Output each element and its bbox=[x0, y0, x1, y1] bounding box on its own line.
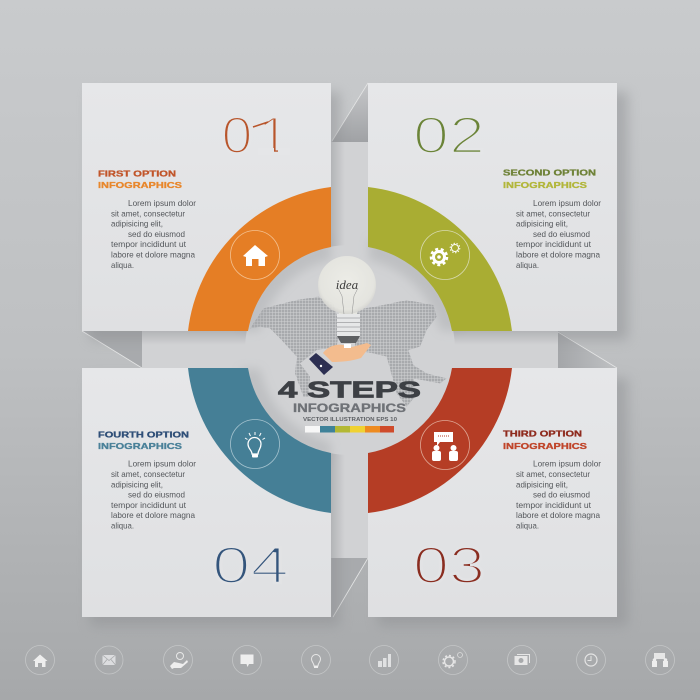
icon: gears bbox=[438, 646, 468, 674]
heading: THIRD OPTION bbox=[503, 428, 582, 438]
heading bbox=[98, 430, 189, 451]
body text bbox=[111, 198, 196, 270]
body text: tempor incididunt ut bbox=[516, 239, 592, 249]
body text bbox=[516, 198, 601, 270]
heading bbox=[503, 428, 588, 451]
number 01 bbox=[222, 107, 290, 165]
number 03: 03 bbox=[413, 537, 485, 595]
hand holding bulb bbox=[309, 343, 371, 375]
icon: banknote bbox=[508, 646, 536, 674]
small caption: VECTOR ILLUSTRATION EPS 10 bbox=[303, 417, 397, 423]
heading: FIRST OPTION bbox=[98, 168, 176, 178]
body text: sit amet, consectetur bbox=[516, 208, 590, 218]
number 02: 02 bbox=[413, 107, 485, 165]
world map bbox=[250, 297, 447, 407]
number 04: 04 bbox=[212, 537, 289, 595]
body text: tempor incididunt ut bbox=[111, 239, 187, 249]
heading: INFOGRAPHICS bbox=[98, 180, 183, 190]
body text bbox=[516, 459, 601, 530]
center cross strips bbox=[142, 142, 558, 558]
body text: sed do eiusmod bbox=[128, 490, 185, 500]
heading bbox=[503, 168, 596, 190]
icon: home bbox=[26, 646, 54, 674]
icon: discussion bbox=[420, 420, 470, 470]
arc: red bbox=[368, 368, 512, 513]
icon: bulb bbox=[302, 646, 330, 674]
icon: speech bbox=[232, 646, 262, 674]
body text: aliqua. bbox=[516, 520, 539, 530]
body text: labore et dolore magna bbox=[516, 250, 600, 260]
body text: sed do eiusmod bbox=[533, 229, 590, 239]
center title bbox=[278, 376, 421, 423]
heading bbox=[98, 168, 183, 190]
heading: FOURTH OPTION bbox=[98, 430, 189, 440]
body text: labore et dolore magna bbox=[111, 510, 195, 520]
body text: sit amet, consectetur bbox=[111, 208, 185, 218]
body text: Lorem ipsum dolor bbox=[128, 198, 196, 208]
icon: clock bbox=[576, 646, 606, 674]
icon: gears bbox=[420, 230, 470, 280]
center circle bbox=[245, 245, 455, 455]
body text: Lorem ipsum dolor bbox=[533, 459, 601, 469]
heading: SECOND OPTION bbox=[503, 168, 596, 178]
bulb screw base bbox=[337, 314, 360, 343]
body text: Lorem ipsum dolor bbox=[533, 198, 601, 208]
filament label: idea bbox=[336, 277, 359, 292]
body text: labore et dolore magna bbox=[516, 510, 600, 520]
body text: tempor incididunt ut bbox=[516, 500, 592, 510]
arc inner shadow bbox=[240, 238, 460, 460]
icon: chart bbox=[370, 646, 398, 674]
body text: tempor incididunt ut bbox=[111, 500, 187, 510]
body text: adipisicing elit, bbox=[111, 219, 163, 229]
body text: sed do eiusmod bbox=[128, 229, 185, 239]
panel: step 4 bbox=[82, 368, 331, 617]
light bulb bbox=[318, 256, 376, 343]
body text: sit amet, consectetur bbox=[111, 469, 185, 479]
icon: money hand bbox=[164, 646, 192, 674]
number 01: 1 bbox=[258, 107, 289, 165]
icon: bulb bbox=[230, 420, 280, 468]
body text: aliqua. bbox=[111, 520, 134, 530]
subtitle: INFOGRAPHICS bbox=[293, 403, 406, 415]
arc: teal bbox=[188, 368, 331, 513]
center back square with folds bbox=[82, 83, 617, 617]
body text: aliqua. bbox=[516, 260, 539, 270]
body text: adipisicing elit, bbox=[111, 479, 163, 489]
panel shadows bbox=[90, 92, 628, 626]
body text bbox=[111, 459, 196, 530]
panel: step 2 bbox=[368, 83, 617, 331]
icon: discussion bbox=[646, 646, 674, 674]
panel: step 1 bbox=[82, 83, 331, 331]
number 01: 0 bbox=[222, 107, 252, 165]
body text: sed do eiusmod bbox=[533, 490, 590, 500]
icon: mail bbox=[95, 646, 123, 674]
heading: INFOGRAPHICS bbox=[98, 441, 183, 451]
bottom icon row bbox=[26, 646, 674, 674]
heading: INFOGRAPHICS bbox=[503, 441, 588, 451]
body text: adipisicing elit, bbox=[516, 219, 568, 229]
body text: sit amet, consectetur bbox=[516, 469, 590, 479]
heading: INFOGRAPHICS bbox=[503, 180, 588, 190]
body text: labore et dolore magna bbox=[111, 250, 195, 260]
body text: aliqua. bbox=[111, 260, 134, 270]
body text: adipisicing elit, bbox=[516, 479, 568, 489]
arc: olive bbox=[368, 187, 512, 331]
colour bar bbox=[305, 426, 394, 432]
arc: orange bbox=[188, 187, 331, 331]
panel: step 3 bbox=[368, 368, 617, 617]
icon: home bbox=[230, 230, 280, 280]
center title: 4 STEPS bbox=[278, 376, 421, 402]
body text: Lorem ipsum dolor bbox=[128, 459, 196, 469]
